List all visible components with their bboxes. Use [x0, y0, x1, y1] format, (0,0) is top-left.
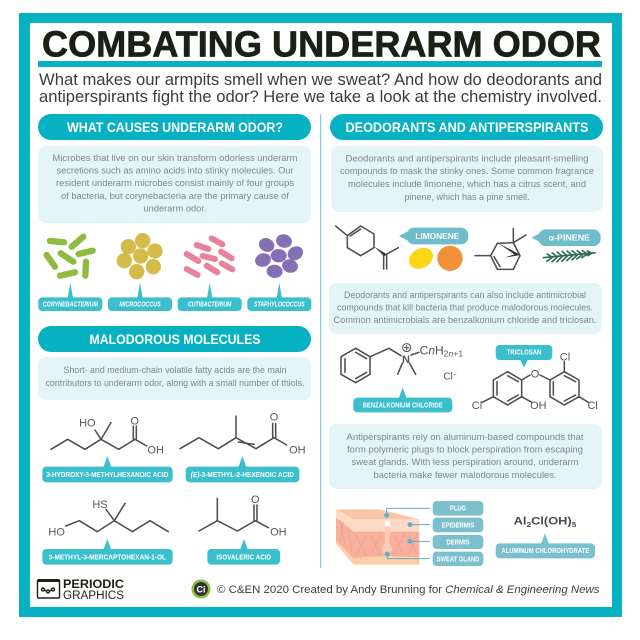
icon: lemon: [405, 244, 437, 273]
heading: what causes underarm odor: WHAT CAUSES UNDERARM ODOR?: [67, 119, 283, 135]
molecule: triclosan: OH: [530, 400, 547, 412]
label: sweat gland: SWEAT GLAND: [437, 556, 479, 563]
text block: malodorous: [38, 357, 311, 400]
label: dermis: DERMIS: [446, 539, 470, 546]
text block: antiperspirants: bacteria make fewer malodorous molecules.: [374, 470, 556, 481]
label: aluminum chlorohydrate: ALUMINUM CHLOROHYDRATE: [501, 548, 590, 555]
skin labels and aluminum chlorohydrate: [433, 501, 595, 566]
text block: antimicrobials: compounds that kill bacteria that produce malodorous molecules.: [337, 302, 593, 314]
molecule: triclosan: Cl: [560, 351, 570, 363]
heading: malodorous molecules: MALODOROUS MOLECULES: [90, 331, 260, 347]
bacteria illustrations and labels: [38, 232, 311, 311]
label: isovaleric acid: [207, 539, 280, 565]
molecule: benzalkonium chloride: N: [402, 354, 410, 366]
text block: antimicrobials: Common antimicrobials are benzalkonium chloride and triclosan.: [334, 315, 596, 326]
molecule: 3-hydroxy-3-methylhexanoic acid: [51, 416, 164, 456]
label: 3-methyl-3-mercaptohexan-1-ol: [42, 539, 173, 565]
text block: fragrance: compounds to mask the stinky ones. Some common fragrance: [340, 166, 594, 177]
label: staphylococcus: [247, 283, 311, 311]
text block: causes: underarm odor.: [144, 204, 206, 214]
antimicrobial molecules: [341, 343, 598, 412]
text block: antiperspirants: Antiperspirants rely on aluminum-based compounds that: [346, 432, 584, 443]
text block: antimicrobials: [329, 283, 602, 334]
molecule: benzalkonium chloride: CnH: [420, 343, 444, 357]
label: 3-methyl-3-mercaptohexan-1-ol: 3-METHYL-3-MERCAPTOHEXAN-1-OL: [49, 554, 167, 561]
label: epidermis: [433, 518, 483, 532]
molecule: 3-hydroxy-3-methylhexanoic acid: HO: [79, 418, 96, 430]
label: benzalkonium chloride: BENZALKONIUM CHLORIDE: [363, 402, 443, 409]
text block: malodorous: Short- and medium-chain volatile fatty acids are the main: [64, 365, 286, 376]
label: corynebacterium: CORYNEBACTERIUM: [43, 302, 98, 309]
molecule: 3-hydroxy-3-methylhexanoic acid: O: [130, 416, 139, 428]
formula: aluminum chlorohydrate: Al: [514, 516, 525, 528]
icon: micrococcus cocci: [117, 233, 163, 279]
heading: deodorants and antiperspirants: DEODORANTS AND ANTIPERSPIRANTS: [346, 119, 588, 135]
icon: orange: [437, 246, 463, 271]
footer: periodic graphics logo: PERIODIC: [63, 579, 124, 591]
intro text: antiperspirants fight the odor? Here we take a look at the chemistry involved.: [39, 88, 602, 106]
label: cutibacterium: [178, 283, 242, 311]
label: aluminum chlorohydrate: [496, 533, 595, 558]
text block: causes: secretions such as amino acids into stinky molecules. Our: [56, 166, 294, 176]
icon: ci logo: [192, 580, 210, 598]
label: micrococcus: MICROCOCCUS: [119, 302, 161, 309]
panel: deodorants and antiperspirants: [329, 114, 603, 566]
label: alpha-pinene: [532, 229, 601, 246]
panel: malodorous molecules: [38, 326, 311, 565]
molecule: triclosan: [472, 351, 598, 412]
footer: periodic graphics logo: [38, 579, 124, 602]
formula: aluminum chlorohydrate: 2: [527, 520, 531, 529]
icon: staphylococcus cocci: [254, 232, 306, 279]
label: benzalkonium chloride: [353, 388, 452, 412]
label: triclosan: [496, 345, 552, 368]
label: micrococcus: [108, 283, 172, 311]
label: 3-hydroxy-3-methylhexanoic acid: [42, 456, 173, 482]
text block: antimicrobials: Deodorants and antiperspirants can also include antimicrobial: [344, 290, 586, 301]
molecule: (E)-3-methyl-2-hexenoic acid: [180, 412, 306, 456]
icon: corynebacterium rods: [47, 237, 93, 276]
molecule: isovaleric acid: OH: [270, 526, 287, 538]
label: (E)-3-methyl-2-hexenoic acid: [186, 456, 299, 482]
formula: aluminum chlorohydrate: 5: [572, 520, 576, 529]
callout lines: [385, 508, 430, 559]
label: epidermis: EPIDERMIS: [442, 522, 475, 529]
heading: what causes underarm odor: [38, 114, 311, 140]
intro text: What makes our armpits smell when we sweat? And how do deodorants and: [39, 71, 602, 89]
text block: antiperspirants: form polymeric plugs to block perspiration from escaping: [347, 444, 583, 456]
text block: causes: of bacteria, but corynebacteria are the primary cause of: [61, 191, 289, 202]
label: (E)-3-methyl-2-hexenoic acid: (E)-3-METHYL-2-HEXENOIC ACID: [191, 472, 294, 479]
molecule: 3-methyl-3-mercaptohexan-1-ol: [48, 499, 168, 539]
molecule: triclosan: O: [531, 368, 540, 380]
text block: fragrance: molecules include limonene, which has a citrus scent, and: [348, 179, 586, 190]
footer: periodic graphics logo: GRAPHICS: [63, 590, 124, 602]
heading: deodorants and antiperspirants: [330, 114, 603, 140]
panel: what causes underarm odor: [38, 114, 311, 311]
molecule: alpha-pinene: [475, 228, 526, 269]
skin cross-section diagram: [336, 508, 430, 565]
label: cutibacterium: CUTIBACTERIUM: [188, 302, 231, 309]
fragrance molecules: [336, 226, 601, 273]
molecule: 3-methyl-3-mercaptohexan-1-ol: HO: [48, 527, 65, 539]
icon: ci logo: Ci: [196, 584, 206, 594]
molecule: benzalkonium chloride: [341, 343, 463, 383]
text block: causes: [38, 146, 311, 223]
text block: fragrance: [331, 146, 603, 212]
label: corynebacterium: [38, 283, 102, 311]
molecule: benzalkonium chloride: −: [453, 372, 457, 379]
formula: aluminum chlorohydrate: Cl(OH): [531, 516, 572, 528]
text block: causes: resident underarm microbes consist mainly of four groups: [56, 178, 294, 189]
text block: fragrance: pinene, which has a pine smell.: [404, 192, 530, 203]
molecule: (E)-3-methyl-2-hexenoic acid: OH: [289, 444, 306, 456]
text block: antiperspirants: [329, 424, 602, 489]
molecule: benzalkonium chloride: 2n+1: [444, 348, 463, 358]
molecule: benzalkonium chloride: Cl: [443, 372, 453, 383]
molecule: isovaleric acid: [199, 494, 287, 538]
text block: causes: Microbes that live on our skin transform odorless underarm: [52, 153, 298, 164]
label: limonene: [399, 228, 468, 244]
label: isovaleric acid: ISOVALERIC ACID: [216, 554, 271, 561]
intro text: [39, 71, 602, 106]
icon: cutibacterium rods: [187, 238, 232, 275]
icon: periodic graphics calendar: [38, 580, 60, 598]
molecules: [42, 412, 306, 565]
footer credit: © C&EN 2020 Created by Andy Brunning for Chemical & Engineering News: [217, 584, 600, 596]
title underline: [38, 61, 602, 67]
text block: fragrance: Deodorants and antiperspirants include pleasant-smelling: [346, 154, 588, 164]
label: dermis: [433, 535, 483, 549]
label: 3-hydroxy-3-methylhexanoic acid: 3-HYDROXY-3-METHYLHEXANOIC ACID: [46, 472, 168, 479]
text block: antiperspirants: sweat glands. With less perspiration around, underarm: [352, 457, 579, 468]
heading: malodorous molecules: [38, 326, 311, 352]
icon: pine sprig: [543, 250, 596, 262]
molecule: (E)-3-methyl-2-hexenoic acid: O: [270, 412, 279, 424]
label: plug: PLUG: [450, 506, 466, 513]
molecule: triclosan: Cl: [472, 400, 482, 412]
label: staphylococcus: STAPHYLOCOCCUS: [254, 302, 305, 309]
text block: malodorous: contributors to underarm odor, along with a small number of thiols.: [46, 378, 304, 389]
molecule: limonene: [336, 226, 398, 269]
title: COMBATING UNDERARM ODOR: [42, 24, 601, 64]
molecule: 3-methyl-3-mercaptohexan-1-ol: HS: [92, 499, 108, 511]
molecule: isovaleric acid: O: [251, 494, 260, 506]
label: triclosan: TRICLOSAN: [507, 350, 541, 357]
label: limonene: LIMONENE: [415, 232, 460, 241]
molecule: 3-hydroxy-3-methylhexanoic acid: OH: [147, 444, 164, 456]
label: plug: [433, 501, 483, 516]
label: sweat gland: [433, 552, 483, 566]
skin layers: [336, 509, 419, 565]
label: alpha-pinene: α-PINENE: [549, 234, 591, 243]
molecule: triclosan: Cl: [587, 400, 598, 412]
